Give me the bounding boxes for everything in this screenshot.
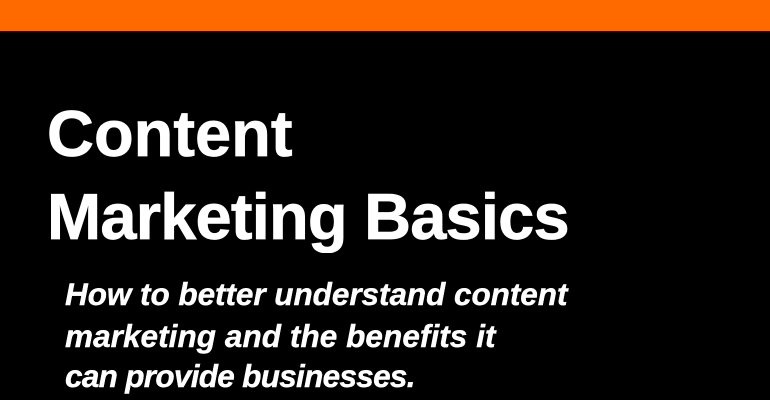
subtitle: How to better understand content	[65, 276, 567, 312]
subtitle: marketing and the benefits it	[65, 318, 496, 354]
orange top band	[0, 0, 770, 31]
title: Marketing Basics	[47, 180, 569, 253]
title	[47, 97, 569, 253]
subtitle	[65, 276, 569, 394]
subtitle: can provide businesses.	[65, 358, 415, 394]
title: Content	[47, 97, 292, 170]
